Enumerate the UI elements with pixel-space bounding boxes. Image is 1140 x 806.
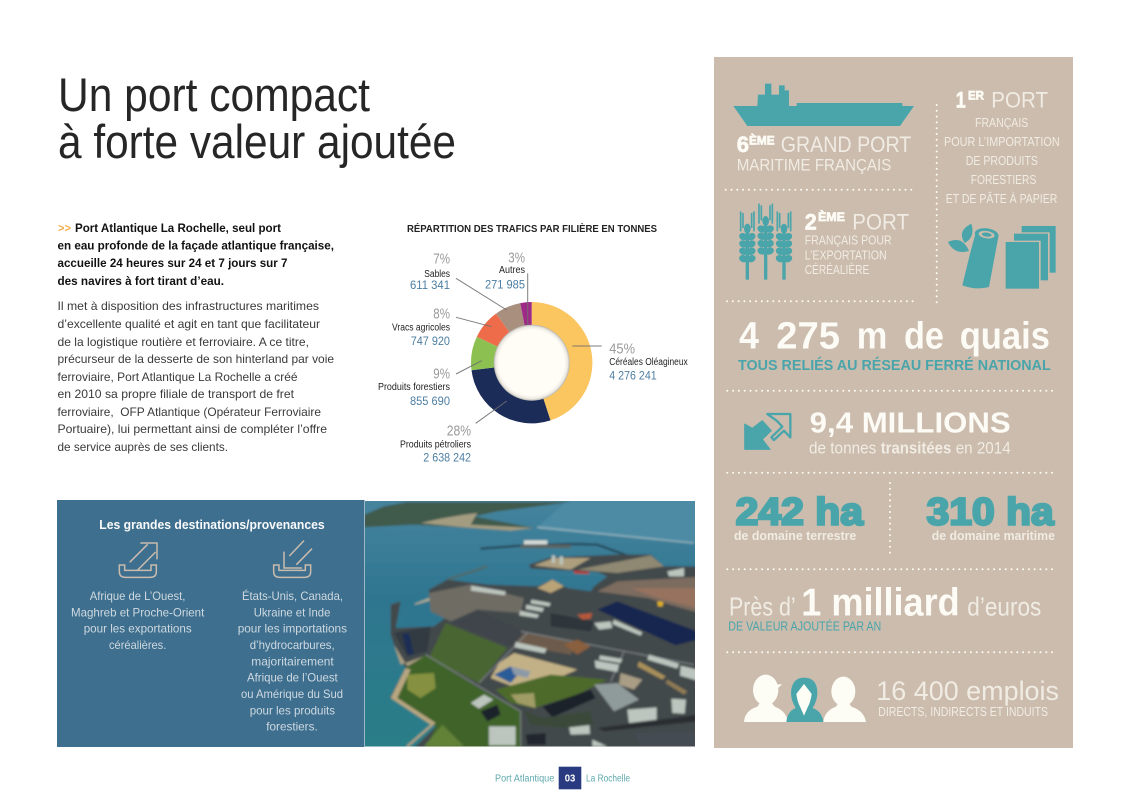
chart labels: 2 638 242 xyxy=(423,451,471,465)
chart title: RÉPARTITION DES TRAFICS PAR FILIÈRE EN TONNES xyxy=(407,222,657,235)
stat: 1er port xyxy=(944,88,1060,206)
stat: 1er port: PORT xyxy=(991,88,1048,113)
chart labels: Produits forestiers xyxy=(378,382,450,393)
stat: quays: 275 xyxy=(776,315,840,357)
stat: quays: 4 xyxy=(739,315,759,357)
stat: 2ème port: ÈME xyxy=(818,209,845,224)
import provenances text: Ukraine et Inde xyxy=(254,605,331,619)
footer: La Rochelle xyxy=(586,774,630,785)
intro text bold: >> xyxy=(58,221,71,235)
title xyxy=(58,68,456,168)
stat: 2ème port: PORT xyxy=(852,210,909,235)
stat: 2ème port: L’EXPORTATION xyxy=(805,248,887,262)
stat: tonnage: de tonnes xyxy=(809,438,876,457)
stat: maritime area: 310 ha xyxy=(927,492,1055,534)
stat: tonnage: transitées xyxy=(881,438,951,457)
stat: 6ème grand port: ÈME xyxy=(749,132,775,147)
stat: 1er port: ER xyxy=(968,89,984,103)
donut chart xyxy=(456,273,602,423)
import provenances text: ou Amérique du Sud xyxy=(241,687,343,701)
footer xyxy=(495,767,630,789)
stat: added value: Près d’ xyxy=(729,592,796,622)
title: à forte valeur ajoutée xyxy=(58,115,456,168)
stat: tonnage: en 2014 xyxy=(956,438,1011,457)
icon: ship xyxy=(733,84,914,126)
chart labels: 8% xyxy=(433,305,450,322)
stat: 2ème port xyxy=(805,209,909,277)
import provenances text: pour les importations xyxy=(238,622,347,636)
body paragraph: en 2010 sa propre filiale de transport de fret xyxy=(58,387,295,401)
intro text bold: en eau profonde de la façade atlantique française, xyxy=(58,238,334,252)
chart labels: 9% xyxy=(433,365,450,382)
footer: Port Atlantique xyxy=(495,774,555,785)
chart labels: Sables xyxy=(424,269,450,280)
import provenances text xyxy=(238,588,347,734)
intro text bold: Port Atlantique La Rochelle, seul port xyxy=(75,221,281,235)
stat: added value: DE VALEUR AJOUTÉE PAR AN xyxy=(728,619,881,634)
icon: import arrow xyxy=(274,541,312,577)
import provenances text: pour les produits xyxy=(250,703,335,717)
stat: tonnage xyxy=(809,407,1011,457)
chart labels: 45% xyxy=(609,340,635,357)
stat: 6ème grand port: 6 xyxy=(737,132,749,157)
panel heading: Les grandes destinations/provenances xyxy=(99,517,325,532)
stat: quays: de xyxy=(904,315,944,357)
chart labels: 855 690 xyxy=(410,394,450,408)
stat: 6ème grand port xyxy=(737,132,911,174)
chart labels: 611 341 xyxy=(410,278,450,292)
chart labels: 4 276 241 xyxy=(609,368,657,382)
chart labels: 747 920 xyxy=(411,334,450,348)
stat: jobs: DIRECTS, INDIRECTS ET INDUITS xyxy=(878,705,1048,719)
stat: quays: quais xyxy=(960,315,1050,357)
chart labels: 3% xyxy=(508,250,525,267)
chart labels: Produits pétroliers xyxy=(400,440,471,451)
stat: 1er port: FRANÇAIS xyxy=(975,116,1028,130)
chart labels xyxy=(378,250,688,465)
icon: export arrow xyxy=(119,543,157,577)
stat: 1er port: POUR L’IMPORTATION xyxy=(944,135,1060,149)
chart labels: Céréales Oléagineux xyxy=(609,357,688,368)
intro text bold xyxy=(58,221,334,288)
leader lines xyxy=(456,273,602,423)
intro text bold: des navires à fort tirant d’eau. xyxy=(58,274,224,288)
aerial photo of the port xyxy=(365,501,695,746)
import provenances text: majoritairement xyxy=(251,654,334,668)
chart labels: 271 985 xyxy=(485,277,525,291)
stat: land area: de domaine terrestre xyxy=(734,528,856,543)
icon: two-way arrows xyxy=(745,414,790,449)
icon: people xyxy=(744,675,866,722)
icon: log and leaves xyxy=(948,224,999,288)
export destinations text xyxy=(71,589,205,652)
body paragraph xyxy=(58,299,334,454)
body paragraph: de la logistique routière et ferroviaire. A ce titre, xyxy=(58,335,309,349)
stat: land area: 242 ha xyxy=(736,492,864,534)
stat: 6ème grand port: GRAND PORT xyxy=(781,132,911,157)
body paragraph: Portuaire), lui permettant ainsi de compléter l’offre xyxy=(58,422,327,436)
stat: 1er port: ET DE PÂTE À PAPIER xyxy=(946,191,1057,206)
stat: added value xyxy=(728,582,1041,634)
stat: 2ème port: 2 xyxy=(805,210,817,235)
icon: paper sheets xyxy=(1004,226,1056,290)
stat: jobs xyxy=(876,676,1059,719)
intro text bold: accueille 24 heures sur 24 et 7 jours sur 7 xyxy=(58,256,288,270)
import provenances text: États-Unis, Canada, xyxy=(242,588,343,603)
chart labels: Autres xyxy=(499,265,525,276)
chart labels: Vracs agricoles xyxy=(392,323,450,334)
export destinations text: Afrique de L’Ouest, xyxy=(90,589,185,603)
import provenances text: forestiers. xyxy=(266,720,318,734)
export destinations text: céréalières. xyxy=(109,638,166,652)
stat: 2ème port: CÉRÉALIÈRE xyxy=(805,262,869,277)
body paragraph: de service auprès de ses clients. xyxy=(58,440,228,454)
body paragraph: Il met à disposition des infrastructures maritimes xyxy=(58,299,319,313)
stat: quays: m xyxy=(857,315,887,357)
stat: 1er port: DE PRODUITS xyxy=(966,154,1038,168)
icon: wheat xyxy=(738,204,793,280)
body paragraph: ferroviaire, OFP Atlantique (Opérateur Ferroviaire xyxy=(58,405,321,419)
stat: maritime area: de domaine maritime xyxy=(932,528,1055,543)
chart labels: 7% xyxy=(433,250,450,268)
chart labels: 28% xyxy=(447,423,471,440)
stat: 1er port: FORESTIERS xyxy=(971,173,1036,187)
stat: 1er port: 1 xyxy=(956,88,966,113)
stat: 6ème grand port: MARITIME FRANÇAIS xyxy=(737,155,891,174)
title: Un port compact xyxy=(58,68,370,121)
stat: added value: d’euros xyxy=(967,592,1041,622)
body paragraph: d’excellente qualité et agit en tant que facilitateur xyxy=(58,317,320,331)
land mass xyxy=(390,553,695,746)
export destinations text: Maghreb et Proche-Orient xyxy=(71,605,205,619)
export destinations text: pour les exportations xyxy=(84,622,192,636)
stat: tonnage: 9,4 MILLIONS xyxy=(810,407,1011,439)
import provenances text: d’hydrocarbures, xyxy=(250,638,335,652)
panel: destinations xyxy=(57,500,364,747)
body paragraph: précurseur de la desserte de son hinterland par voie xyxy=(58,352,334,366)
stat: quays: TOUS RELIÉS AU RÉSEAU FERRÉ NATIONAL xyxy=(738,357,1051,374)
panel: key figures xyxy=(714,57,1073,748)
buildings xyxy=(471,555,697,746)
stat: jobs: 16 400 emplois xyxy=(876,676,1059,706)
body paragraph: ferroviaire, Port Atlantique La Rochelle a créé xyxy=(58,370,298,384)
import provenances text: Afrique de l’Ouest xyxy=(247,671,338,685)
stat: quays xyxy=(738,315,1051,374)
stat: 2ème port: FRANÇAIS POUR xyxy=(805,234,892,248)
stat: added value: 1 milliard xyxy=(801,582,960,625)
footer: 03 xyxy=(565,774,576,785)
